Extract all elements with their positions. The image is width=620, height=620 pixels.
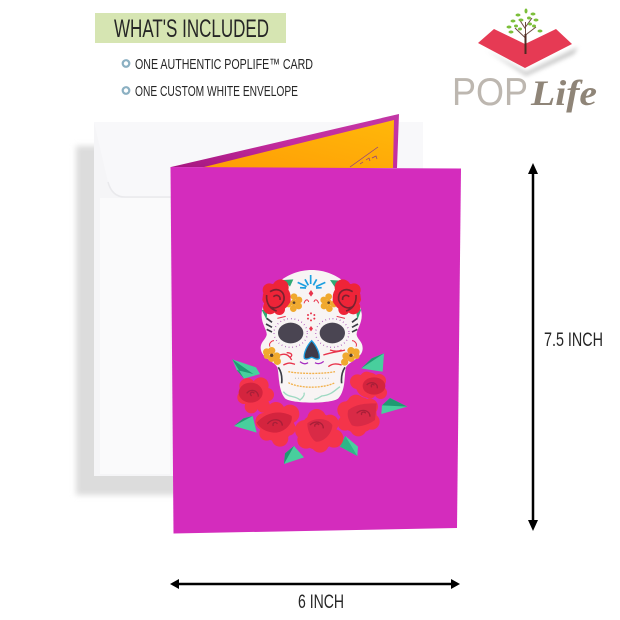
bullet item: card xyxy=(123,56,313,73)
purple mustache xyxy=(300,361,324,364)
side black strokes xyxy=(266,318,358,383)
rose 4 xyxy=(295,409,343,453)
logo wordmark: POP xyxy=(452,71,528,114)
envelope shadow xyxy=(76,146,181,495)
envelope body xyxy=(94,122,423,476)
rose 1 xyxy=(237,377,274,413)
skull xyxy=(261,270,363,403)
card front xyxy=(170,167,461,534)
envelope with shadow xyxy=(76,122,423,495)
forehead blue fan xyxy=(298,275,325,288)
inside signature doodle xyxy=(350,147,378,167)
card inside: orange xyxy=(200,120,394,168)
heading: what's included xyxy=(95,13,286,43)
crown rose left xyxy=(262,279,291,315)
skull base xyxy=(261,270,363,403)
logo: poplife: Life xyxy=(530,73,597,113)
bullet item: envelope: ONE CUSTOM WHITE ENVELOPE xyxy=(135,83,298,100)
dimension arrow: height xyxy=(528,163,538,531)
rose 3 xyxy=(255,402,299,447)
bottom roses xyxy=(237,372,387,453)
chin mint swirls xyxy=(283,387,340,400)
yellow flowers xyxy=(263,293,360,366)
dotted eye rings xyxy=(274,319,349,347)
crown leaves xyxy=(262,279,361,320)
envelope flap xyxy=(94,122,423,197)
logo shadow xyxy=(486,47,578,76)
nose xyxy=(304,341,319,359)
forehead and face red ornaments xyxy=(309,290,313,331)
logo: poplife xyxy=(452,8,597,114)
crown rose right xyxy=(333,279,361,315)
bottom leaves xyxy=(232,353,407,464)
dimension label: height: 7.5 INCH xyxy=(544,330,603,351)
rose 2 xyxy=(350,372,387,399)
bullet item: card: ONE AUTHENTIC POPLIFE™ CARD xyxy=(135,56,313,73)
teeth orange smile xyxy=(288,372,335,387)
logo: red open book xyxy=(478,29,572,68)
bullet item: envelope xyxy=(123,83,298,100)
eye sockets xyxy=(278,323,303,343)
card back flap xyxy=(171,114,399,168)
heading: what's included: WHAT'S INCLUDED xyxy=(114,15,269,43)
dimension label: width: 6 INCH xyxy=(298,592,344,613)
rose 5 xyxy=(337,395,380,436)
dimension arrow: width xyxy=(170,579,460,589)
list: included items xyxy=(123,56,313,100)
logo: tree xyxy=(506,8,542,54)
sugar skull artwork xyxy=(232,270,407,464)
